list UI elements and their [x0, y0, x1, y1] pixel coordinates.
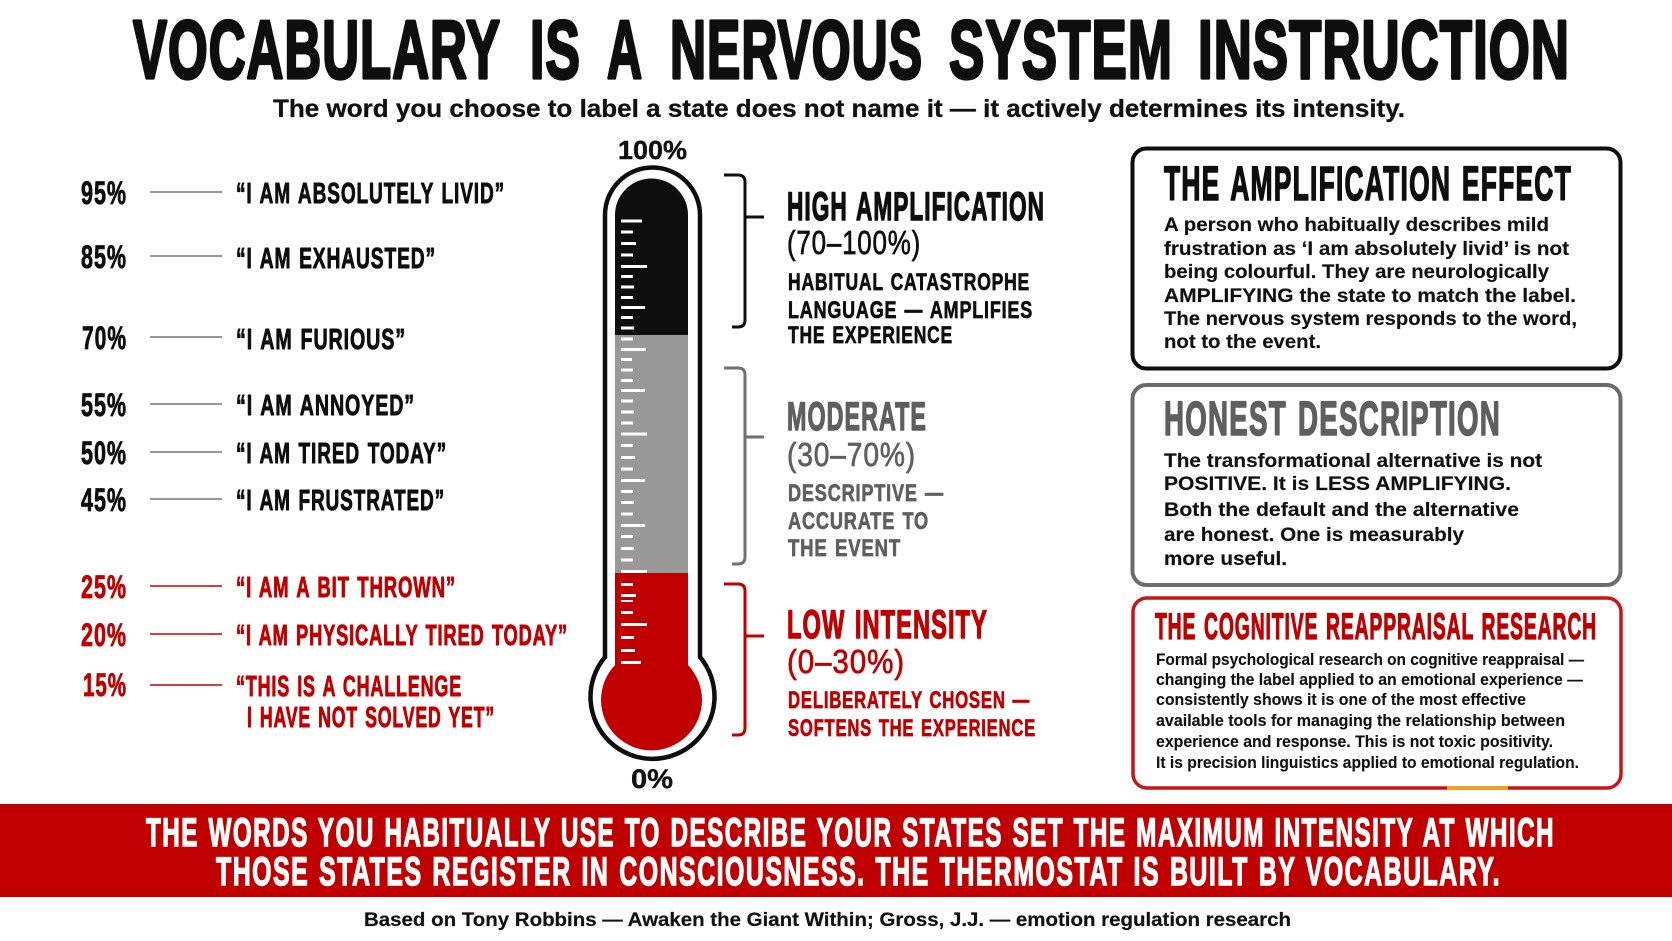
row: 15%: 15%: [83, 667, 127, 703]
title: IS: [530, 3, 581, 96]
orange accent: [1447, 786, 1508, 790]
title: SYSTEM: [949, 3, 1173, 96]
row: 25%: [81, 569, 456, 605]
zone: high amplification: HABITUAL CATASTROPHE: [788, 269, 1030, 296]
title: NERVOUS: [670, 3, 923, 96]
row: 15%: “THIS IS A CHALLENGE: [236, 671, 462, 703]
row: 25%: “I AM A BIT THROWN”: [236, 572, 456, 604]
row: 95%: [81, 175, 505, 211]
row: 70%: [82, 320, 406, 356]
row: 20%: [81, 617, 568, 653]
zone: moderate: MODERATE: [787, 395, 927, 439]
row: 85%: [81, 239, 436, 275]
body text: [1164, 214, 1577, 353]
body text: available tools for managing the relationship between: [1156, 712, 1565, 730]
zone: high amplification: HIGH AMPLIFICATION: [787, 185, 1045, 229]
zone: moderate: (30–70%): [787, 436, 916, 473]
row: 45%: 45%: [81, 482, 127, 518]
zone: low intensity: [787, 603, 1036, 742]
label: 100%: 100%: [618, 135, 687, 165]
footer: source: Based on Tony Robbins — Awaken the Giant Within; Gross, J.J. — emotion regulation research: [364, 909, 1291, 931]
bracket: low: [724, 584, 764, 735]
row: 15%: [83, 667, 495, 734]
body text: [1156, 651, 1584, 772]
row: 50%: “I AM TIRED TODAY”: [236, 438, 447, 470]
zone: moderate: THE EVENT: [788, 535, 901, 562]
zone: low intensity: SOFTENS THE EXPERIENCE: [788, 715, 1036, 742]
body text: more useful.: [1164, 548, 1287, 570]
row: 45%: [81, 482, 445, 518]
row: 85%: “I AM EXHAUSTED”: [236, 243, 436, 275]
row: 85%: 85%: [81, 239, 127, 275]
body text: experience and response. This is not toxic positivity.: [1156, 733, 1553, 751]
fill: moderate band (grey): [615, 335, 688, 573]
fill: low band and bulb (red): [601, 573, 702, 750]
banner: conclusion: [0, 804, 1672, 897]
fill: high band (black): [615, 178, 688, 335]
row: 95%: 95%: [81, 175, 127, 211]
row: 50%: [81, 435, 447, 471]
panel: honest description: [1132, 385, 1620, 585]
zone: moderate: [787, 395, 944, 562]
body text: Both the default and the alternative: [1164, 499, 1519, 521]
subtitle: The word you choose to label a state does not name it — it actively determines its intensity.: [273, 95, 1405, 123]
row: 15%: I HAVE NOT SOLVED YET”: [247, 702, 495, 734]
tick marks: [621, 220, 647, 664]
zone: low intensity: (0–30%): [787, 643, 905, 680]
row: 95%: “I AM ABSOLUTELY LIVID”: [236, 178, 505, 210]
left scale: word intensity labels: [81, 175, 568, 734]
panel: the cognitive reappraisal research: [1133, 598, 1621, 790]
row: 70%: “I AM FURIOUS”: [236, 324, 406, 356]
title: [133, 3, 1570, 96]
thermometer outline: [590, 168, 714, 759]
label: 0%: 0%: [631, 764, 673, 794]
bracket: moderate: [724, 368, 764, 564]
zone: low intensity: DELIBERATELY CHOSEN —: [788, 687, 1030, 714]
row: 55%: [81, 387, 415, 423]
body text: being colourful. They are neurologically: [1164, 261, 1549, 283]
zone: high amplification: THE EXPERIENCE: [788, 322, 953, 349]
row: 20%: 20%: [81, 617, 127, 653]
body text: not to the event.: [1164, 331, 1321, 353]
row: 50%: 50%: [81, 435, 127, 471]
zone: moderate: ACCURATE TO: [788, 508, 929, 535]
body text: [1164, 450, 1543, 570]
body text: are honest. One is measurably: [1164, 524, 1464, 546]
body text: AMPLIFYING the state to match the label.: [1164, 285, 1576, 307]
bracket: high: [724, 175, 764, 327]
body text: Formal psychological research on cognitive reappraisal —: [1156, 651, 1584, 669]
body text: frustration as ‘I am absolutely livid’ is not: [1164, 238, 1570, 260]
row: 25%: 25%: [81, 569, 127, 605]
row: 70%: 70%: [82, 320, 127, 356]
body text: POSITIVE. It is LESS AMPLIFYING.: [1164, 473, 1511, 495]
zone: high amplification: LANGUAGE — AMPLIFIES: [788, 297, 1033, 324]
zone: low intensity: LOW INTENSITY: [787, 603, 988, 647]
body text: The transformational alternative is not: [1164, 450, 1543, 472]
body text: It is precision linguistics applied to emotional regulation.: [1156, 754, 1579, 772]
body text: consistently shows it is one of the most effective: [1156, 691, 1526, 709]
zone: moderate: DESCRIPTIVE —: [788, 480, 944, 507]
body text: A person who habitually describes mild: [1164, 214, 1549, 236]
thermometer: [590, 135, 714, 794]
row: 20%: “I AM PHYSICALLY TIRED TODAY”: [236, 620, 568, 652]
row: 55%: “I AM ANNOYED”: [236, 390, 415, 422]
row: 55%: 55%: [81, 387, 127, 423]
zone: high amplification: (70–100%): [787, 224, 921, 261]
body text: changing the label applied to an emotional experience —: [1156, 671, 1583, 689]
title: VOCABULARY: [133, 3, 501, 96]
row: 45%: “I AM FRUSTRATED”: [236, 485, 445, 517]
zone: high amplification: [787, 185, 1045, 349]
title: A: [607, 3, 643, 96]
body text: The nervous system responds to the word,: [1164, 308, 1577, 330]
panel: the amplification effect: [1132, 148, 1620, 368]
